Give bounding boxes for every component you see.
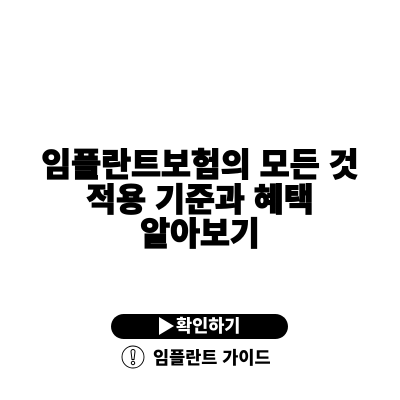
button label: 확인하기 — [176, 313, 240, 338]
title: 적용 기준과 혜택 — [86, 174, 314, 221]
icon: exclamation circle — [122, 346, 144, 368]
title: 알아보기 — [140, 208, 260, 255]
button: confirm — [111, 314, 288, 339]
guide label: 임플란트 가이드 — [153, 345, 271, 370]
icon: play triangle — [159, 317, 174, 335]
title: 임플란트보험의 모든 것 — [41, 139, 359, 186]
title — [41, 139, 359, 255]
